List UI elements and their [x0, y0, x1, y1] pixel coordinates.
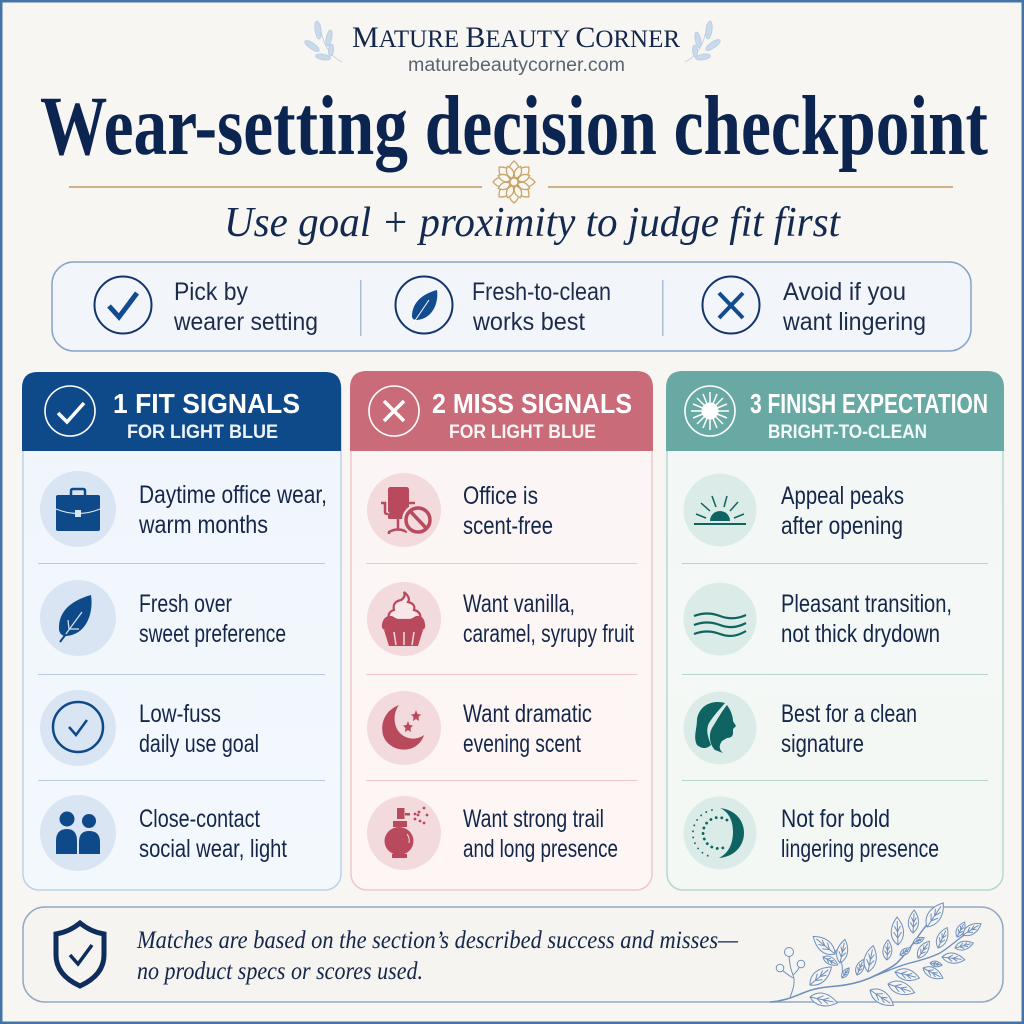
panel: miss signals — [350, 371, 653, 890]
header: miss signals — [350, 371, 653, 451]
item: best for a clean signature: signature — [781, 730, 864, 758]
header: fit signals: FOR LIGHT BLUE — [127, 422, 278, 443]
text: fresh-to-clean works best — [472, 278, 611, 336]
item: want dramatic: Want dramatic — [463, 700, 592, 728]
item: pleasant transition — [684, 582, 952, 656]
item: want dramatic — [367, 691, 592, 765]
brand url: maturebeautycorner.com — [408, 55, 625, 76]
header: miss signals: FOR LIGHT BLUE — [449, 422, 596, 443]
item: daytime office wear: warm months — [138, 511, 268, 539]
text: avoid if you want lingering — [782, 278, 926, 336]
icon: check circle — [94, 276, 152, 334]
item: low-fuss daily use — [40, 690, 259, 766]
item: pleasant transition: Pleasant transition, — [781, 590, 952, 618]
item: best for a clean signature: Best for a clean — [781, 700, 917, 728]
header: fit signals: 1 FIT SIGNALS — [113, 388, 300, 419]
item: appeal peaks — [684, 474, 904, 546]
item: close-contact social: Close-contact — [139, 805, 260, 833]
footer text: no product specs or scores used. — [137, 958, 423, 985]
icon: shield check — [56, 923, 104, 986]
item: want strong trail: Want strong trail — [463, 805, 604, 833]
item: pleasant transition: not thick drydown — [781, 620, 940, 648]
item: want vanilla — [367, 582, 634, 656]
logo: Mature Beauty Corner — [303, 21, 722, 76]
panel: fit signals — [22, 372, 341, 890]
text: avoid if you want lingering: want lingering — [782, 308, 926, 336]
divider with gold flower — [69, 161, 953, 203]
panel: summary strip — [52, 262, 971, 351]
item: fresh over sweet: sweet preference — [139, 620, 286, 648]
text: pick by wearer setting — [173, 278, 318, 336]
illustration: leafy branch — [770, 899, 983, 1010]
icon: cross circle — [702, 276, 760, 334]
icon: gold flower — [493, 161, 535, 203]
item: not for bold lingering: lingering presence — [781, 835, 939, 863]
header: fit signals — [22, 372, 341, 451]
item: want strong trail: and long presence — [463, 835, 618, 863]
item: daytime office wear — [40, 471, 327, 547]
icon: left laurel — [303, 21, 342, 62]
item: want strong trail — [367, 796, 618, 870]
header: finish expectation — [666, 371, 1004, 451]
panel: finish expectation — [666, 371, 1004, 890]
text: fresh-to-clean works best: Fresh-to-clean — [472, 278, 611, 306]
item: office is scent-free — [367, 473, 553, 547]
text: pick by wearer setting: wearer setting — [173, 308, 318, 336]
item: daytime office wear: Daytime office wear, — [139, 481, 327, 509]
item: office is scent-free: scent-free — [463, 512, 553, 540]
header: finish expectation: BRIGHT-TO-CLEAN — [768, 422, 927, 443]
panel: footer note — [23, 899, 1003, 1010]
item: want vanilla: caramel, syrupy fruit — [463, 620, 634, 648]
item: appeal peaks: Appeal peaks — [781, 482, 904, 510]
item: close-contact social: social wear, light — [139, 835, 287, 863]
text: pick by wearer setting: Pick by — [174, 278, 248, 306]
header: miss signals: 2 MISS SIGNALS — [432, 388, 632, 419]
footer text: Matches are based on the section’s described success and misses— — [136, 927, 739, 954]
footer text — [136, 927, 739, 985]
item: low-fuss daily use: Low-fuss — [139, 700, 221, 728]
subtitle: Use goal + proximity to judge fit first — [224, 200, 841, 246]
item: appeal peaks: after opening — [781, 512, 903, 540]
icon: right laurel — [685, 21, 722, 62]
brand name: MATURE BEAUTY CORNER — [352, 21, 680, 54]
icon: leaf circle — [396, 276, 452, 334]
item: office is scent-free: Office is — [463, 482, 538, 510]
item: not for bold lingering: Not for bold — [781, 805, 890, 833]
item: close-contact social — [40, 795, 287, 871]
item: low-fuss daily use: daily use goal — [139, 730, 259, 758]
item: fresh over sweet: Fresh over — [139, 590, 232, 618]
text: fresh-to-clean works best: works best — [472, 308, 585, 336]
item: want dramatic: evening scent — [463, 730, 581, 758]
item: not for bold lingering — [684, 796, 939, 870]
item: fresh over sweet — [40, 580, 286, 656]
text: avoid if you want lingering: Avoid if you — [783, 278, 906, 306]
item: best for a clean signature — [684, 692, 917, 764]
item: want vanilla: Want vanilla, — [463, 590, 575, 618]
